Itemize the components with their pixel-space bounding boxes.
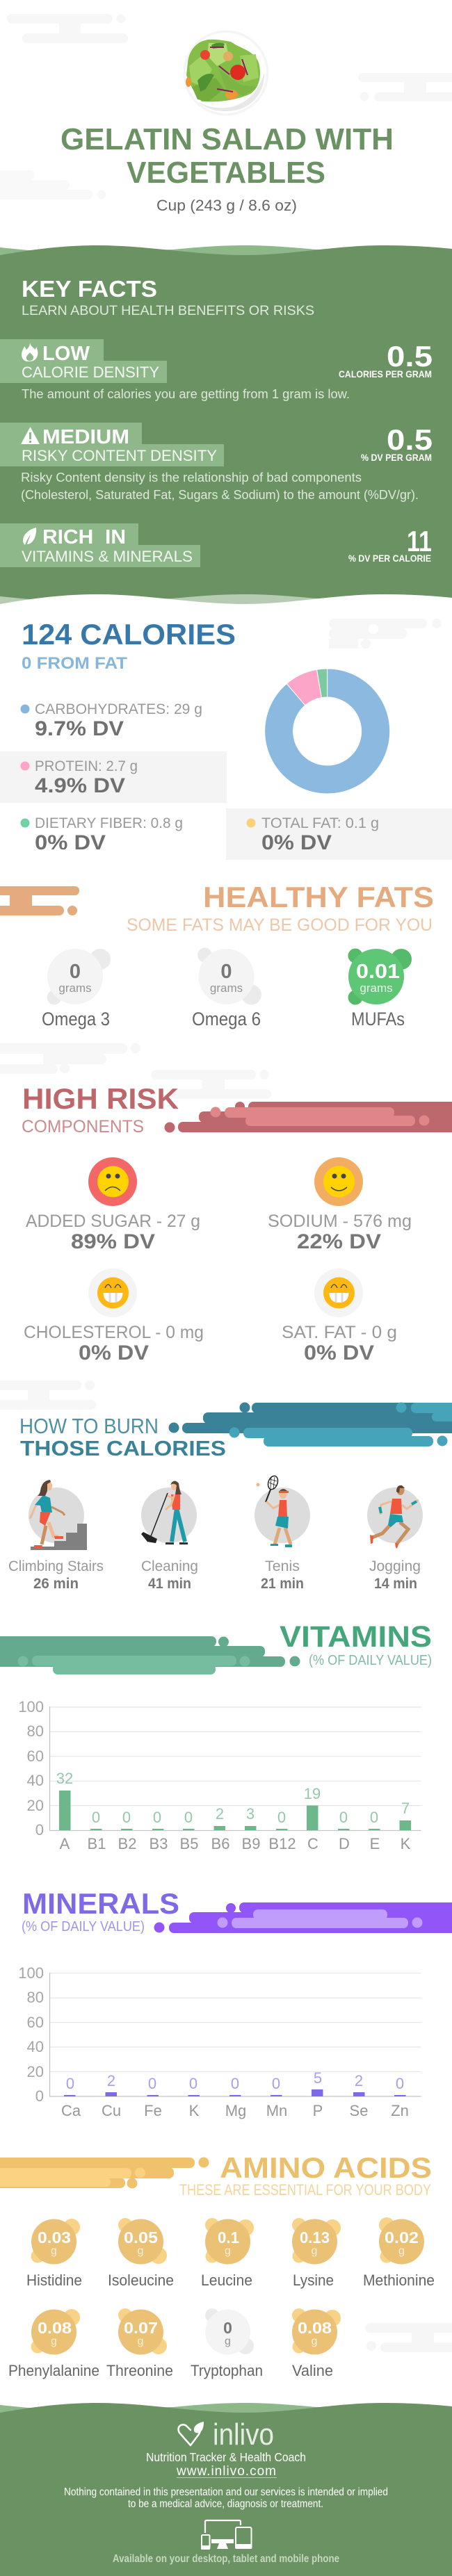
fat: omega 3: grams [58, 981, 92, 995]
fact: medium risky content density: Risky Content density is the relationship of bad components [21, 471, 362, 484]
title [60, 122, 394, 190]
bar chart: vitamins: 0 [184, 1809, 193, 1826]
bar chart: minerals: 2 [107, 2072, 115, 2089]
fact: low calorie density: CALORIES PER GRAM [339, 368, 432, 380]
subheading: healthy fats: SOME FATS MAY BE GOOD FOR YOU [127, 915, 433, 935]
background cloud: top right [358, 73, 452, 101]
bar chart: vitamins: E [370, 1835, 380, 1852]
fat: omega 6: Omega 6 [192, 1009, 261, 1029]
amino acid: methionine: 0.02 [385, 2228, 419, 2247]
bar chart: vitamins: B1 [88, 1835, 106, 1852]
bar chart: vitamins: A [60, 1835, 70, 1852]
icon: leaf [23, 528, 36, 545]
amino acid: leucine: Leucine [201, 2272, 252, 2289]
amino acid: histidine: Histidine [26, 2272, 82, 2289]
bar chart: minerals: Se [350, 2102, 368, 2119]
icon: flame [22, 343, 38, 361]
icon: stairs [31, 1524, 87, 1550]
fact: rich in vitamins and minerals: RICH IN [42, 526, 126, 548]
availability note: Available on your desktop, tablet and mobile phone [113, 2553, 339, 2565]
fact: rich in vitamins and minerals: VITAMINS & MINERALS [22, 548, 193, 565]
activity: cleaning [141, 1481, 198, 1592]
activity: cleaning: 41 min [148, 1576, 191, 1592]
risk: added sugar: ADDED SUGAR - 27 g [26, 1212, 200, 1231]
risk: saturated fat: SAT. FAT - 0 g [282, 1323, 397, 1342]
fact: rich in vitamins and minerals: 11 [407, 525, 432, 557]
bar chart: vitamins: C [307, 1835, 318, 1852]
legend: dietary fiber: DIETARY FIBER: 0.8 g [35, 815, 183, 831]
heading: minerals: MINERALS [22, 1887, 179, 1920]
bar chart: vitamins: 0 [370, 1809, 378, 1826]
amino acid: threonine: 0.07 [124, 2319, 158, 2337]
legend: carbohydrates: 9.7% DV [35, 717, 124, 740]
subheading: vitamins: (% OF DAILY VALUE) [309, 1653, 432, 1668]
bar chart: vitamins: B3 [150, 1835, 168, 1852]
fact: low calorie density: The amount of calories you are getting from 1 gram is low. [22, 387, 350, 401]
bar chart: vitamins: B6 [211, 1835, 229, 1852]
amino acid: leucine [201, 2218, 254, 2289]
bar chart: minerals: 0 [148, 2075, 156, 2092]
icon: jogger [370, 1485, 419, 1549]
bar chart: vitamins: D [339, 1835, 350, 1852]
amino acid: methionine: Methionine [363, 2272, 435, 2289]
bar chart: minerals: K [189, 2102, 200, 2119]
subheading: components: COMPONENTS [22, 1117, 144, 1136]
website link: www.inlivo.com [176, 2464, 276, 2479]
fat: omega 3: 0 [70, 961, 81, 983]
panel: key facts [0, 245, 452, 615]
amino acid: tryptophan: 0 [223, 2319, 232, 2337]
serving size: Cup (243 g / 8.6 oz) [156, 197, 297, 214]
activity: tennis [255, 1474, 310, 1592]
bar chart: vitamins: K [401, 1835, 411, 1852]
icon: woman climbing [30, 1480, 65, 1548]
icon: devices [201, 2520, 252, 2550]
icon: woman sweeping [141, 1481, 188, 1544]
risk: sodium [268, 1157, 412, 1253]
amino acid: threonine: g [138, 2335, 143, 2347]
disclaimer: Nothing contained in this presentation and our services is intended or implied [64, 2486, 388, 2498]
bar chart: vitamins: 0 [277, 1809, 286, 1826]
bar chart: vitamins: 0 [339, 1809, 348, 1826]
amino acid: valine: g [312, 2335, 317, 2347]
icon: warning triangle [21, 427, 40, 444]
bar chart: vitamins: 32 [56, 1770, 73, 1787]
title: VEGETABLES [127, 156, 325, 190]
bar chart: minerals: 20 [27, 2063, 44, 2080]
amino acid: tryptophan [191, 2308, 263, 2379]
amino acid: valine: 0.08 [298, 2319, 332, 2337]
bar chart: minerals: 0 [231, 2075, 239, 2092]
bar chart: minerals: 0 [396, 2075, 404, 2092]
bar chart: minerals: 0 [66, 2075, 74, 2092]
fat: omega 6: grams [210, 981, 243, 995]
fat: omega 6 [192, 948, 261, 1029]
amino acid: methionine [363, 2217, 435, 2289]
legend: protein [0, 751, 227, 803]
background cloud: left of title [0, 170, 106, 199]
background cloud: amino acids [365, 2323, 452, 2352]
decoration: minerals cloud [154, 1902, 452, 1933]
fact: medium risky content density: MEDIUM [42, 426, 129, 448]
bar chart: minerals: Cu [102, 2102, 121, 2119]
legend: total fat [226, 808, 452, 860]
bar chart: vitamins: 7 [401, 1800, 410, 1817]
icon: smiling face [314, 1157, 363, 1206]
subheading: from fat: 0 FROM FAT [22, 654, 127, 673]
background cloud: calories [329, 619, 442, 649]
fat: MUFAs [348, 948, 412, 1029]
decoration: healthy fats cloud [0, 886, 79, 915]
bar chart: minerals: Fe [144, 2102, 162, 2119]
decoration: vitamins cloud [0, 1636, 300, 1674]
bar chart: minerals: 0 [189, 2075, 197, 2092]
bar chart: minerals: 5 [314, 2069, 322, 2087]
heading: those calories: THOSE CALORIES [20, 1436, 226, 1460]
background cloud: top left [7, 14, 128, 43]
amino acid: lysine: Lysine [293, 2272, 334, 2289]
bar chart: minerals: 60 [27, 2014, 44, 2031]
bar chart: minerals: Mn [266, 2102, 287, 2119]
amino acid: leucine: 0.1 [218, 2228, 239, 2247]
amino acid: threonine [106, 2308, 173, 2379]
legend: protein: 4.9% DV [35, 774, 125, 797]
fact: low calorie density: LOW [42, 343, 90, 365]
legend: protein: PROTEIN: 2.7 g [35, 758, 138, 774]
amino acid: methionine: g [398, 2245, 405, 2257]
amino acid: phenylalanine [8, 2309, 99, 2379]
amino acid: threonine: Threonine [106, 2362, 173, 2379]
title: GELATIN SALAD WITH [60, 122, 394, 156]
bar chart: minerals: 80 [27, 1989, 44, 2006]
icon: grinning face [314, 1269, 363, 1317]
activity: cleaning: Cleaning [141, 1558, 198, 1574]
bar chart: vitamins: 2 [216, 1805, 224, 1823]
bar chart: vitamins: B12 [268, 1835, 296, 1852]
risk: cholesterol [24, 1269, 204, 1364]
heading: calories: 124 CALORIES [22, 618, 236, 651]
fat: MUFAs: MUFAs [351, 1009, 405, 1029]
logo wordmark: inlivo [213, 2418, 274, 2452]
bar chart: vitamins: B2 [118, 1835, 136, 1852]
bar chart: vitamins: B5 [180, 1835, 198, 1852]
tagline: Nutrition Tracker & Health Coach [146, 2450, 306, 2464]
amino acid: histidine: 0.03 [38, 2228, 71, 2247]
amino acid: histidine: g [51, 2245, 57, 2257]
risk: cholesterol: CHOLESTEROL - 0 mg [24, 1323, 204, 1342]
bar chart: minerals: Mg [225, 2102, 246, 2119]
decoration: high risk cloud [164, 1102, 452, 1133]
bar chart: minerals: Zn [391, 2102, 409, 2119]
amino acid: tryptophan: g [225, 2335, 231, 2347]
heading: how to burn: HOW TO BURN [19, 1414, 159, 1438]
heading: amino acids: AMINO ACIDS [220, 2151, 432, 2184]
amino acid: isoleucine: Isoleucine [108, 2272, 174, 2289]
amino acid: valine: Valine [292, 2362, 333, 2379]
heading: vitamins: VITAMINS [280, 1620, 432, 1654]
activity: jogging: Jogging [369, 1558, 421, 1574]
activity: climbing stairs: 26 min [33, 1576, 79, 1592]
amino acid: lysine [292, 2218, 341, 2289]
disclaimer: to be a medical advice, diagnosis or treatment. [128, 2498, 323, 2510]
fact: medium risky content density: % DV PER GRAM [361, 452, 432, 463]
risk: added sugar: 89% DV [71, 1230, 155, 1253]
bar chart: minerals [18, 1964, 421, 2119]
heading: key facts: KEY FACTS [22, 276, 157, 302]
fact: low calorie density [0, 339, 433, 401]
fact: medium risky content density [0, 423, 433, 502]
activity: climbing stairs: Climbing Stairs [8, 1558, 104, 1574]
fact: rich in vitamins and minerals [0, 523, 432, 567]
bar chart: vitamins: 19 [304, 1785, 321, 1802]
heading: high risk: HIGH RISK [22, 1082, 179, 1115]
fact: medium risky content density: (Cholesterol, Saturated Fat, Sugars & Sodium) to the amount (%DV/gr). [21, 488, 419, 502]
bar chart: minerals: 0 [272, 2075, 280, 2092]
icon: inlivo heart logo [179, 2422, 204, 2445]
bar chart: vitamins: 0 [153, 1809, 161, 1826]
legend: total fat: 0% DV [261, 831, 332, 854]
legend: dietary fiber: 0% DV [35, 831, 106, 854]
bar chart: minerals: 100 [18, 1964, 44, 1982]
decoration: burn cloud [168, 1403, 452, 1446]
amino acid: isoleucine: g [138, 2245, 143, 2257]
fact: rich in vitamins and minerals: % DV PER CALORIE [348, 553, 431, 564]
fact: medium risky content density: RISKY CONTENT DENSITY [22, 447, 217, 464]
bar chart: vitamins [18, 1698, 421, 1852]
risk: added sugar [26, 1157, 200, 1253]
bar chart: vitamins: B9 [242, 1835, 260, 1852]
bar chart: vitamins: 0 [92, 1809, 100, 1826]
bar chart: minerals: Ca [61, 2102, 81, 2119]
bar chart: vitamins: 0 [122, 1809, 131, 1826]
legend: dietary fiber [21, 815, 183, 854]
activity: tennis: Tenis [265, 1558, 300, 1574]
risk: saturated fat: 0% DV [304, 1342, 374, 1364]
fat: MUFAs: 0.01 [356, 961, 400, 983]
legend: carbohydrates [21, 701, 202, 740]
fat: MUFAs: grams [360, 981, 393, 995]
icon: grinning face [88, 1269, 137, 1317]
fat: omega 3: Omega 3 [42, 1009, 110, 1029]
bar chart: vitamins: 20 [27, 1797, 44, 1814]
bar chart: minerals: 0 [35, 2087, 44, 2105]
background cloud: burn [0, 1380, 96, 1410]
legend: total fat: TOTAL FAT: 0.1 g [261, 815, 379, 831]
bar chart: vitamins: 3 [246, 1805, 255, 1823]
subheading: minerals: (% OF DAILY VALUE) [22, 1919, 145, 1934]
fact: medium risky content density: 0.5 [387, 423, 433, 456]
amino acid: isoleucine [108, 2218, 174, 2289]
fact: low calorie density: 0.5 [387, 340, 433, 373]
bar chart: minerals: 40 [27, 2038, 44, 2055]
amino acid: tryptophan: Tryptophan [191, 2362, 263, 2379]
bar chart: vitamins: 40 [27, 1772, 44, 1789]
heading: healthy fats: HEALTHY FATS [203, 881, 434, 913]
activity: jogging: 14 min [374, 1576, 417, 1592]
icon: salad bowl [184, 31, 268, 115]
amino acid: phenylalanine: 0.08 [38, 2319, 72, 2337]
subheading: key facts: LEARN ABOUT HEALTH BENEFITS OR RISKS [22, 304, 314, 318]
bar chart: minerals: P [313, 2102, 323, 2119]
fact: low calorie density: CALORIE DENSITY [22, 364, 159, 381]
panel: footer [0, 2403, 452, 2576]
risk: sodium: SODIUM - 576 mg [268, 1212, 412, 1231]
bar chart: vitamins: 80 [27, 1722, 44, 1740]
activity: tennis: 21 min [261, 1576, 304, 1592]
risk: sodium: 22% DV [297, 1230, 381, 1253]
activity: climbing stairs [8, 1480, 104, 1592]
risk: cholesterol: 0% DV [79, 1342, 149, 1364]
fat: omega 3 [42, 949, 111, 1029]
amino acid: isoleucine: 0.05 [124, 2228, 158, 2247]
amino acid: leucine: g [225, 2245, 231, 2257]
disclaimer [64, 2486, 388, 2510]
bar chart: vitamins: 100 [18, 1698, 44, 1715]
legend: carbohydrates: CARBOHYDRATES: 29 g [35, 701, 202, 717]
amino acid: lysine: 0.13 [300, 2228, 330, 2247]
donut chart: macronutrients [265, 669, 390, 794]
amino acid: lysine: g [312, 2245, 317, 2257]
amino acid: histidine [26, 2219, 82, 2289]
fat: omega 6: 0 [220, 961, 232, 983]
risk: saturated fat [282, 1269, 397, 1364]
amino acid: valine [292, 2308, 341, 2379]
activity: jogging [367, 1485, 423, 1592]
bar chart: minerals: 2 [355, 2072, 363, 2089]
bar chart: vitamins: 0 [35, 1821, 44, 1839]
icon: tennis player [256, 1474, 292, 1547]
background cloud: before high risk [0, 1043, 271, 1099]
icon: sad face [88, 1157, 137, 1206]
bar chart: vitamins: 60 [27, 1747, 44, 1765]
decoration: amino acids cloud [0, 2158, 209, 2188]
amino acid: phenylalanine: g [51, 2335, 57, 2347]
amino acid: phenylalanine: Phenylalanine [8, 2362, 99, 2379]
